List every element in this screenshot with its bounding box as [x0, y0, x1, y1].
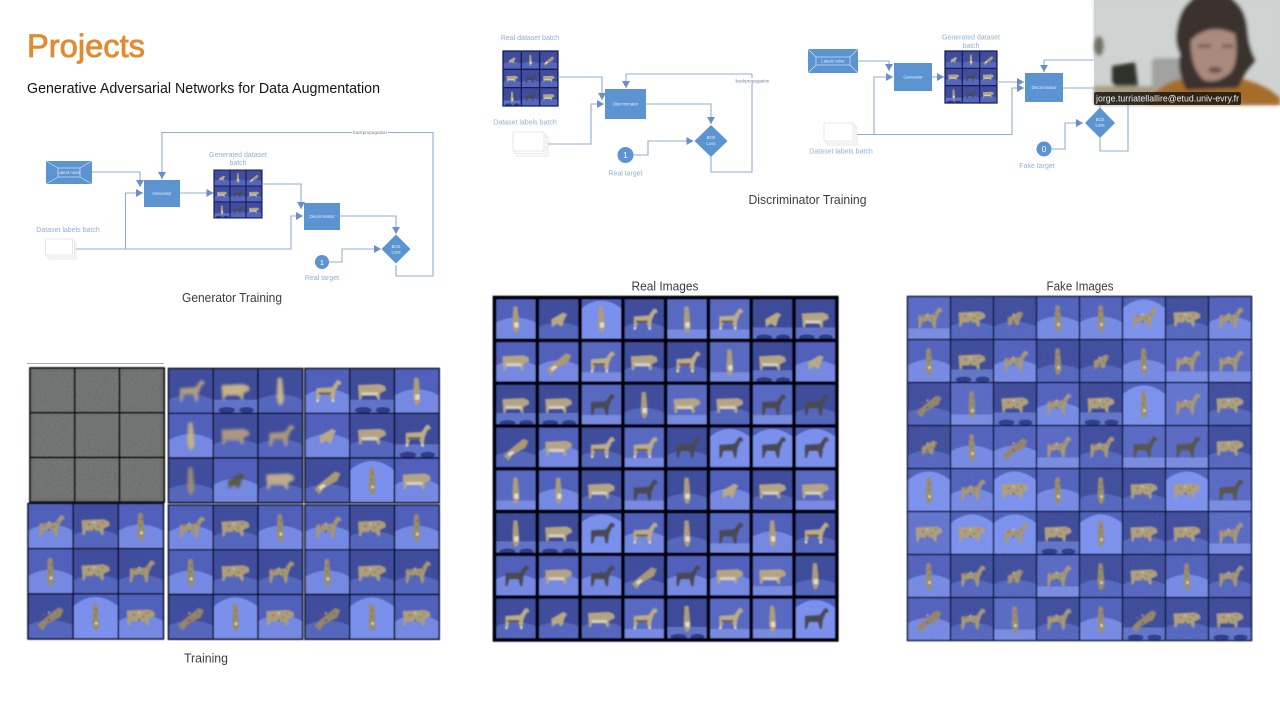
real target label: Real target — [305, 275, 339, 282]
generated batch caption: batch — [229, 160, 247, 167]
backpropagation label: backpropagation — [736, 78, 770, 84]
real batch label: Real dataset batch — [501, 35, 559, 42]
backpropagation loop — [626, 74, 752, 172]
discriminator block: Discriminator — [309, 214, 335, 219]
real target circle: 1 — [320, 258, 324, 267]
discriminator training caption: Discriminator Training — [748, 193, 867, 207]
generated batch caption: batch — [962, 43, 980, 50]
panel: fake images grid — [908, 296, 1252, 640]
BCE loss diamond — [694, 125, 728, 157]
arrow target to loss — [329, 249, 381, 262]
fake images heading: Fake Images — [1046, 280, 1114, 294]
training caption: Training — [184, 652, 228, 666]
arrow target to loss — [633, 141, 694, 155]
diagram: discriminator training, real — [493, 35, 867, 207]
latent noise block: Latent noise — [57, 170, 81, 175]
generated batch caption: Generated dataset — [209, 152, 267, 159]
generated batch thumbnail — [214, 170, 262, 218]
real target label: Real target — [608, 170, 643, 178]
discriminator block: Discriminator — [613, 102, 639, 106]
diagram: discriminator training, fake — [808, 34, 1128, 170]
dataset labels text: Dataset labels batch — [809, 148, 873, 156]
BCE loss diamond: BCE — [1096, 117, 1105, 122]
arrow noise to generator — [92, 172, 140, 187]
arrow discriminator to loss — [1063, 88, 1100, 108]
dataset labels text: Dataset labels batch — [493, 120, 557, 126]
arrow labels to generator — [126, 193, 143, 249]
BCE loss diamond: Loss — [391, 250, 401, 254]
webcam overlay — [1094, 0, 1280, 105]
title: Projects — [27, 28, 145, 64]
participant name tag: jorge.turriatellallire@etud.univ-evry.fr — [1095, 94, 1239, 104]
BCE loss diamond: Loss — [706, 141, 716, 146]
backpropagation label: backpropagation — [353, 130, 387, 135]
arrow labels to discriminator — [76, 216, 303, 249]
subtitle: Generative Adversarial Networks for Data Augmentation — [27, 81, 380, 97]
arrow discriminator to loss — [340, 216, 396, 234]
training epoch 5 grid — [168, 505, 303, 639]
dataset labels text: Dataset labels batch — [36, 227, 100, 234]
discriminator block: Discriminator — [1031, 85, 1057, 90]
divider above training grid — [27, 363, 164, 364]
face — [1191, 29, 1236, 81]
generator block — [894, 63, 932, 91]
arrow real batch to discriminator — [558, 77, 602, 100]
real batch thumbnail — [503, 51, 558, 106]
arrow labels to discriminator — [548, 104, 604, 144]
BCE loss diamond: Loss — [1095, 122, 1105, 128]
latent noise block: Latent noise — [821, 58, 845, 64]
chair — [1152, 58, 1186, 94]
dataset labels stack — [46, 239, 76, 259]
backpropagation loop — [1044, 60, 1128, 151]
discriminator block — [304, 203, 340, 230]
hair — [1176, 0, 1256, 90]
real images heading: Real Images — [632, 280, 698, 294]
generator block: Generator — [903, 74, 923, 80]
real target circle: 1 — [623, 151, 628, 160]
fake target circle: 0 — [1042, 145, 1047, 154]
generator block — [144, 180, 180, 207]
training epoch 4 grid — [28, 504, 163, 639]
BCE loss diamond: BCE — [392, 244, 401, 249]
dataset labels stack — [513, 132, 548, 156]
training epoch 6 grid — [305, 505, 439, 639]
dataset labels stack — [824, 123, 857, 145]
fake target label: Fake target — [1019, 163, 1055, 170]
latent noise block — [808, 49, 858, 73]
BCE loss diamond — [382, 234, 410, 264]
real target circle — [315, 255, 329, 269]
panel: training progression — [28, 368, 439, 666]
arrow noise to generator — [858, 61, 889, 71]
BCE loss diamond — [1085, 108, 1115, 138]
generated batch caption: Generated dataset — [942, 34, 1000, 42]
panel: real images grid — [494, 298, 837, 640]
generator block: Generator — [152, 191, 172, 196]
arrow labels to generator — [874, 77, 893, 134]
arrow generator to batch — [932, 76, 944, 78]
plant — [1112, 62, 1138, 92]
shoulders — [1146, 78, 1280, 105]
training epoch 1 noise grid — [30, 368, 164, 502]
arrow batch to discriminator — [262, 184, 301, 209]
arrow target to loss — [1051, 123, 1083, 149]
arrow batch to discriminator — [997, 81, 1024, 83]
generated batch thumbnail — [945, 51, 997, 103]
real target circle — [618, 147, 634, 163]
fake target circle — [1036, 142, 1052, 156]
diagram: generator training — [36, 129, 433, 305]
arrow labels to discriminator — [857, 88, 1024, 134]
generator training caption: Generator Training — [182, 291, 282, 305]
BCE loss diamond: BCE — [707, 135, 716, 140]
arrow generator to batch — [180, 192, 214, 194]
training epoch 2 blurry grid — [168, 368, 303, 503]
arrow discriminator to loss — [646, 104, 711, 124]
training epoch 3 grid — [305, 368, 439, 503]
latent noise block — [46, 161, 92, 184]
generator backpropagation loop — [162, 132, 433, 276]
discriminator block — [1025, 73, 1063, 102]
discriminator block — [605, 89, 646, 119]
